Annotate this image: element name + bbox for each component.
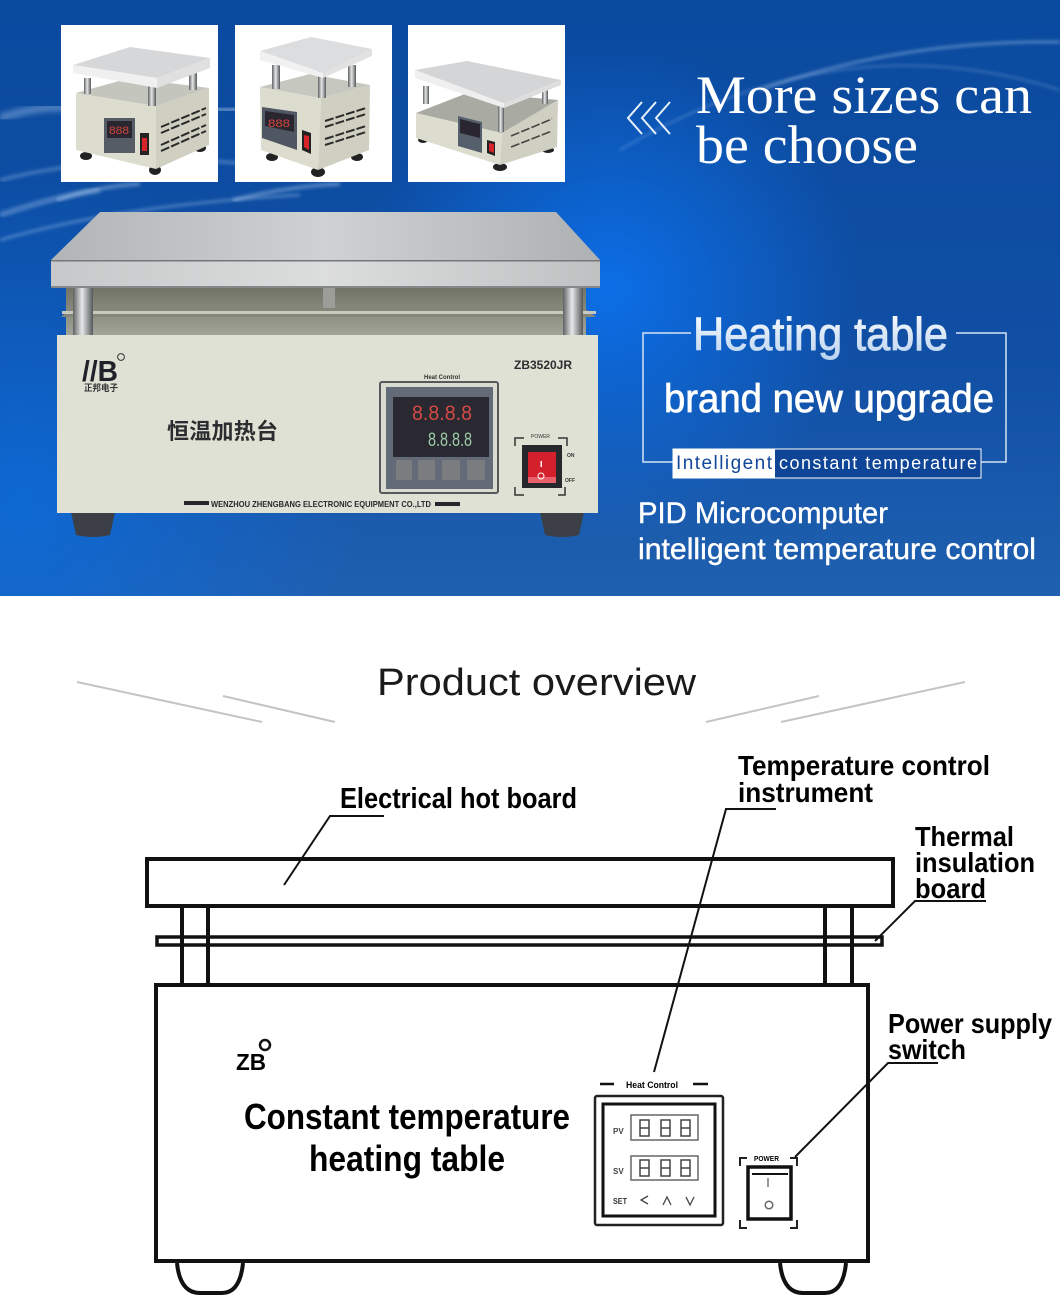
icon: triple left chevrons [628, 102, 670, 134]
thumbnail: square heating table, view 2: 888 [268, 118, 290, 130]
text: PID microcomputer control [638, 497, 1036, 566]
panel: heating table upgrade frame [643, 308, 1006, 478]
power switch: OFF [565, 478, 575, 484]
manufacturer line: WENZHOU ZHENGBANG ELECTRONIC EQUIPMENT CO.,LTD [211, 499, 431, 509]
temperature controller: 8.8.8.8 [412, 402, 472, 425]
thumbnail: rectangular heating table, view 3 [408, 25, 565, 182]
callout: thermal insulation board: Thermal [915, 821, 1014, 852]
diagram temperature controller: SV [613, 1167, 624, 1176]
blue banner background [0, 0, 1060, 596]
diagram power switch [740, 1156, 797, 1228]
power switch: POWER [531, 434, 550, 440]
callout: thermal insulation board: insulation [915, 847, 1035, 878]
heading: more sizes: More sizes can [696, 65, 1032, 125]
machine feet [71, 512, 584, 537]
diagram temperature controller: SET [613, 1197, 627, 1206]
diagram temperature controller: PV [613, 1127, 624, 1136]
diagram thermal insulation board [157, 937, 882, 945]
diagram feet [177, 1263, 846, 1293]
callout: thermal insulation board [875, 821, 1035, 941]
heading: more sizes: be choose [696, 115, 918, 175]
temperature controller [380, 375, 498, 493]
brand logo: //B [82, 356, 118, 388]
temperature controller: 8.8.8.8 [428, 430, 472, 451]
machine body [57, 335, 598, 513]
thumbnail: square heating table, view 1 [61, 25, 218, 182]
heading: heating table: Heating table [693, 308, 948, 360]
diagram body label [244, 1096, 570, 1179]
callout: temperature control instrument: Temperature control [738, 750, 990, 781]
callout: temperature control instrument [654, 750, 990, 1072]
diagram logo [236, 1040, 270, 1075]
subheading: brand new upgrade: brand new upgrade [664, 377, 994, 421]
thumbnail: square heating table, view 1: 888 [109, 125, 129, 137]
machine heated plate [51, 212, 600, 288]
callout: power supply switch [795, 1008, 1052, 1157]
machine gap and pillars [61, 285, 596, 337]
diagram: heating table line drawing [147, 859, 893, 1293]
callout: electrical hot board: Electrical hot board [340, 783, 577, 815]
diagram logo: ZB [236, 1049, 266, 1075]
text: PID microcomputer control: intelligent temperature control [638, 533, 1036, 566]
diagram pillars [182, 906, 852, 985]
diagram body [156, 985, 868, 1261]
diagram power switch: POWER [754, 1156, 779, 1163]
callout: temperature control instrument: instrument [738, 777, 873, 808]
temperature controller: Heat Control [424, 375, 460, 381]
thumbnail: square heating table, view 2 [235, 25, 392, 182]
tag: intelligent constant temperature [673, 449, 981, 478]
main product photo: heating table [51, 212, 600, 537]
diagram temperature controller [595, 1080, 723, 1225]
tag: intelligent constant temperature: constant temperature [779, 453, 977, 473]
brand logo: 正邦电子 [84, 382, 118, 393]
diagram hot board [147, 859, 893, 906]
power switch: ON [567, 453, 575, 459]
callout: electrical hot board [284, 783, 577, 885]
Chinese product name: 恒温加热台 [167, 419, 278, 444]
tag: intelligent constant temperature: Intelligent [676, 453, 773, 474]
heading: more sizes [696, 65, 1032, 175]
diagram body label: heating table [309, 1138, 505, 1179]
model number: ZB3520JR [514, 358, 572, 372]
callout: thermal insulation board: board [915, 873, 986, 904]
diagram body label: Constant temperature [244, 1096, 570, 1137]
text: PID microcomputer control: PID Microcomputer [638, 497, 888, 530]
callout: power supply switch: switch [888, 1034, 966, 1065]
power switch [515, 434, 575, 495]
title: product overview: Product overview [377, 662, 697, 704]
diagram temperature controller: Heat Control [626, 1080, 678, 1091]
